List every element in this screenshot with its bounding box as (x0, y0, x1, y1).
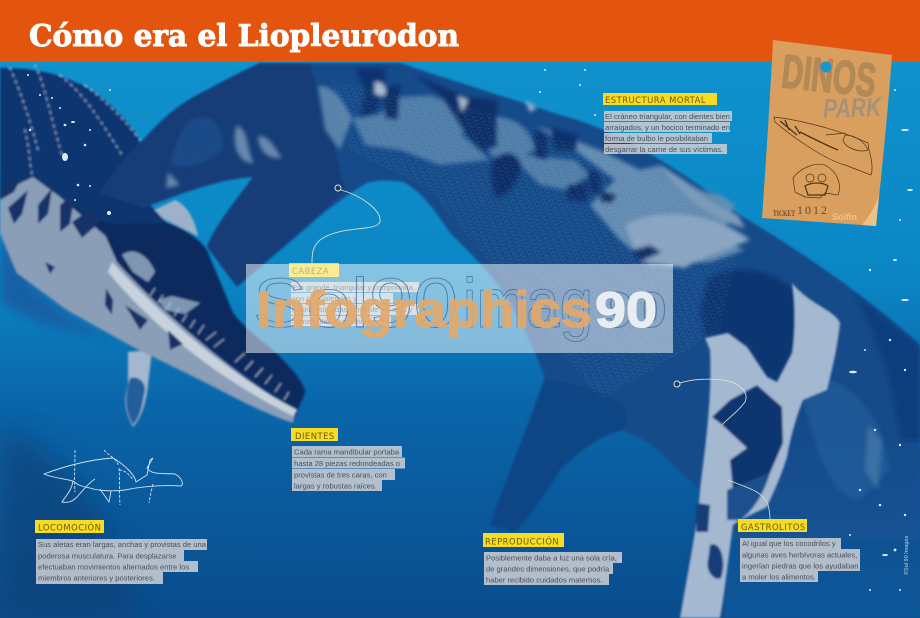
text: dientes: largas y robustas raíces. (294, 482, 377, 490)
ticket number: TICKET (773, 209, 795, 218)
ticket drawing: skull side view (774, 117, 872, 175)
ticket logo: Solfin (832, 212, 857, 222)
text: gastrolitos: algunas aves herbívoras actuales, (742, 550, 857, 560)
illustration: second Liopleurodon (0, 65, 305, 427)
text: gastrolitos: Al igual que los cocodrilos y (742, 539, 836, 548)
ticket hole (820, 62, 832, 72)
callout: cabeza (289, 263, 419, 326)
callout: gastrolitos (738, 519, 860, 582)
text: reproducción: Posiblemente daba a luz una sola cría, (486, 554, 617, 562)
text: estructura mortal: desgarrar la carne de sus víctimas. (605, 145, 723, 154)
watermark number: 90 (595, 282, 657, 338)
watermark outline text: Sol90 (253, 264, 458, 342)
text: cabeza: con ojos laterales y (292, 294, 357, 303)
mottled neck and body patches (166, 68, 920, 500)
back speckled stripes (10, 65, 140, 178)
callout line: cabeza (312, 185, 380, 263)
callout: reproducción (483, 533, 622, 585)
callout: dientes (291, 428, 405, 491)
text: locomoción: Sus aletas eran largas, anchas y provistas de una (38, 540, 207, 549)
callout line: gastrolitos lower (728, 480, 770, 519)
label: cabeza: CABEZA (292, 266, 329, 276)
ticket drawing: skull front view (793, 164, 839, 198)
ticket: Dinos Park (762, 40, 892, 226)
text: gastrolitos: a moler los alimentos. (742, 572, 816, 582)
watermark outline text: imag (463, 264, 593, 342)
skeleton sketch icon (44, 450, 182, 505)
pale front flipper (680, 283, 840, 618)
photo credit: ©Sol 90 Images (903, 536, 910, 575)
text: gastrolitos: ingerían piedras que los ayudaban (742, 562, 859, 570)
text: cabeza: narinas situadas cerca de los ojos y (292, 305, 413, 314)
watermark outline text: 90 (600, 282, 667, 338)
label: dientes: DIENTES (295, 431, 335, 441)
callout line: gastrolitos upper (674, 379, 746, 425)
watermark panel (246, 264, 673, 353)
label: gastrolitos: GASTROLITOS (741, 522, 806, 532)
text: estructura mortal: El cráneo triangular, con dientes bien (605, 112, 730, 121)
label: locomoción: LOCOMOCIÓN (38, 522, 101, 532)
ticket subheading: Park: PARK (823, 92, 884, 124)
text: reproducción: haber recibido cuidados maternos. (486, 576, 603, 584)
ticket number (773, 203, 829, 218)
callout: locomoción (35, 520, 207, 584)
text: dientes: provistas de tres caras, con (294, 470, 387, 480)
watermark outline text (253, 264, 667, 342)
text: dientes: hasta 28 piezas redondeadas o (294, 459, 400, 468)
scale texture (330, 80, 740, 400)
header band (0, 0, 920, 62)
callout: estructura mortal (603, 93, 732, 154)
ticket number: 1012 (797, 203, 829, 217)
watermark orange text: Infographics (256, 281, 592, 338)
text: locomoción: efectuaban movimientos alternados entre los (38, 562, 189, 572)
text: reproducción: de grandes dimensiones, que podría (486, 564, 610, 574)
text: dientes: Cada rama mandibular portaba (294, 448, 400, 456)
label: reproducción: REPRODUCCIÓN (485, 536, 559, 546)
text: locomoción: miembros anteriores y posteriores. (38, 574, 155, 582)
label: estructura mortal: ESTRUCTURA MORTAL (605, 95, 706, 105)
text: estructura mortal: arraigados, y un hocico terminado en (605, 123, 730, 132)
text: cabeza: Era grande, triangular y comprimida, (292, 283, 415, 292)
text: estructura mortal: forma de bulbo le posibilitaban (605, 134, 708, 143)
text: cabeza: mandíbulas muy potentes. (292, 317, 381, 326)
teeth (150, 288, 289, 400)
title: Cómo era el Liopleurodon (29, 19, 459, 54)
text: locomoción: poderosa musculatura. Para desplazarse (38, 552, 176, 560)
